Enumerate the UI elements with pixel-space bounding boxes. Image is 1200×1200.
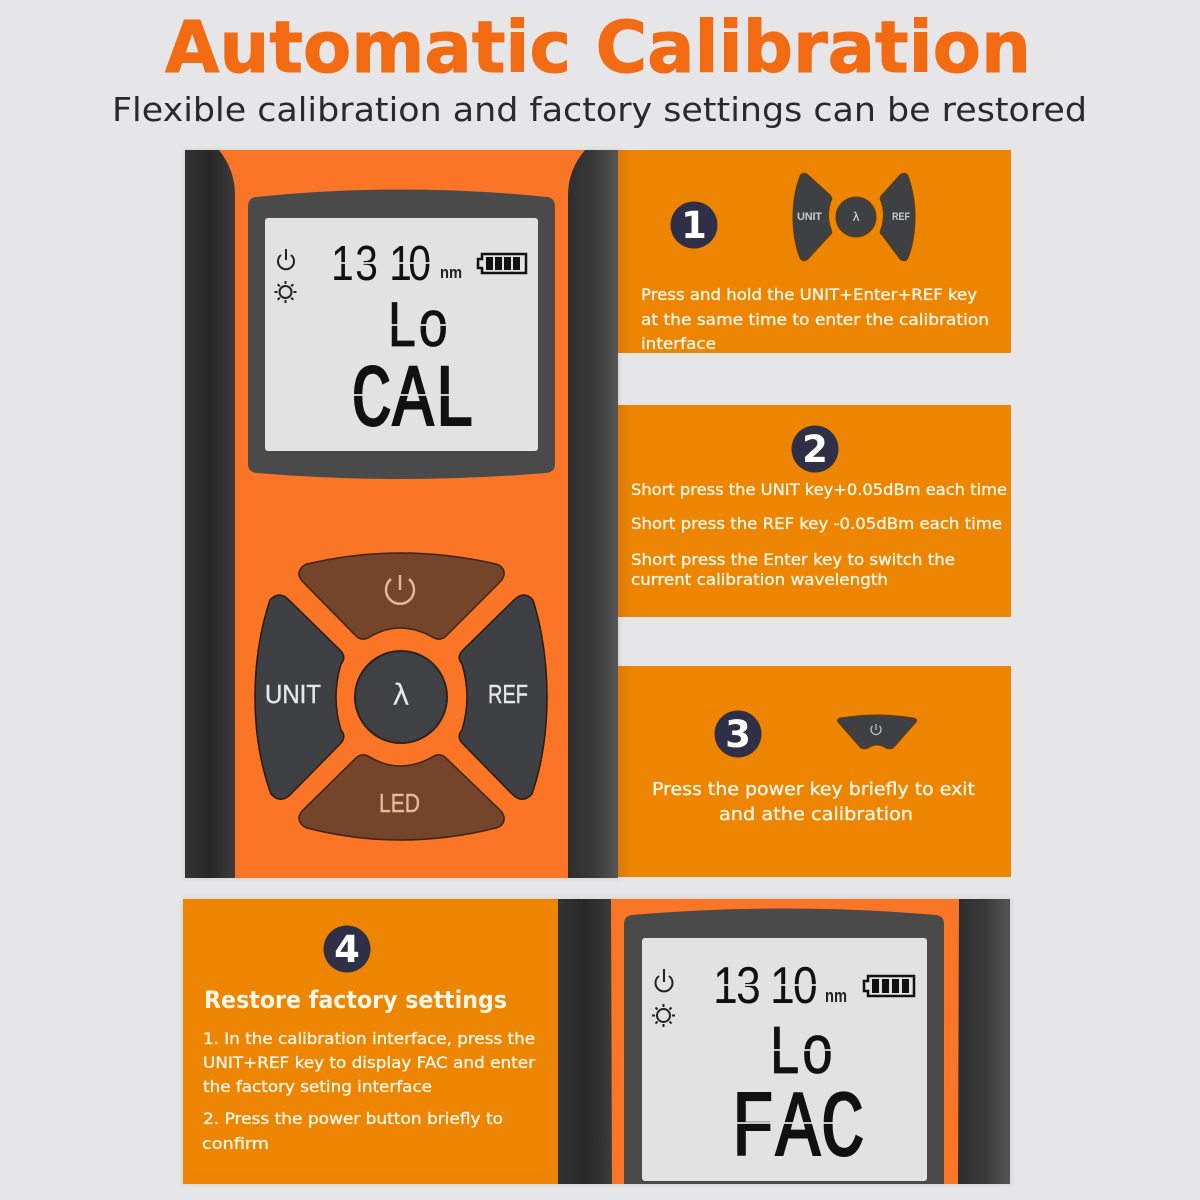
- step badge 4: 4: [334, 928, 360, 971]
- icon: UNIT, enter and REF keys: [793, 173, 915, 261]
- instruction text 1: [641, 285, 989, 353]
- button: REF: [459, 595, 547, 799]
- icon: power key: [837, 715, 917, 749]
- status CAL: CAL: [351, 353, 475, 452]
- mode Lo: Lo: [386, 291, 449, 366]
- status FAC: FAC: [731, 1078, 865, 1184]
- icon: UNIT, enter and REF keys: REF: [892, 211, 910, 223]
- title: Automatic Calibration: [165, 6, 1031, 89]
- instruction text 4: UNIT+REF key to display FAC and enter: [203, 1053, 535, 1072]
- instruction text 1: interface: [641, 334, 716, 353]
- panel 2: [618, 405, 1011, 617]
- left grip: [558, 899, 612, 1184]
- LCD screen: [265, 218, 538, 452]
- unit nm: nm: [440, 263, 462, 282]
- step badge 3: [714, 710, 762, 758]
- device: main tester: [185, 150, 618, 878]
- step badge 4: [324, 926, 370, 972]
- subtitle: Flexible calibration and factory settings can be restored: [112, 90, 1087, 129]
- wavelength reading: 1310: [331, 235, 431, 291]
- wavelength reading: 1310: [713, 957, 818, 1015]
- LCD screen: [642, 938, 927, 1184]
- instruction text 2: [631, 480, 1007, 589]
- right grip: [568, 150, 618, 878]
- instruction text 4: 2. Press the power button briefly to: [203, 1109, 503, 1128]
- instruction text 4: 1. In the calibration interface, press the: [203, 1029, 535, 1048]
- step badge 2: [792, 426, 838, 472]
- button: REF: REF: [488, 679, 528, 709]
- button: UNIT: [255, 595, 344, 799]
- device: factory screen close-up: [558, 899, 1010, 1184]
- instruction text 2: current calibration wavelength: [631, 570, 888, 589]
- unit nm: nm: [825, 986, 847, 1006]
- icon: UNIT, enter and REF keys: λ: [852, 210, 860, 224]
- instruction text 3: [652, 779, 975, 825]
- step badge 2: 2: [802, 428, 828, 471]
- screen bezel: [248, 190, 555, 479]
- step badge 3: 3: [725, 713, 751, 756]
- button: enter lambda: λ: [392, 678, 410, 712]
- panel heading: Restore factory settings: [204, 986, 507, 1014]
- left grip: [185, 150, 235, 878]
- icon: brightness sun: [652, 1004, 675, 1027]
- instruction text 4: the factory seting interface: [203, 1077, 432, 1096]
- instruction text 3: Press the power key briefly to exit: [652, 779, 975, 800]
- right grip: [958, 899, 1010, 1184]
- panel 4: restore factory settings: [183, 899, 558, 1184]
- button: LED: LED: [379, 788, 420, 818]
- icon: power: [278, 249, 294, 269]
- instruction text 1: at the same time to enter the calibration: [641, 310, 989, 329]
- instruction text 4: [202, 1029, 535, 1153]
- instruction text 2: Short press the UNIT key+0.05dBm each time: [631, 480, 1007, 499]
- instruction text 2: Short press the REF key -0.05dBm each time: [631, 514, 1002, 533]
- icon: brightness sun: [274, 281, 296, 303]
- step badge 1: [670, 202, 718, 248]
- instruction text 2: Short press the Enter key to switch the: [631, 550, 955, 569]
- step badge 1: 1: [681, 204, 707, 247]
- instruction text 1: Press and hold the UNIT+Enter+REF key: [641, 285, 977, 304]
- icon: UNIT, enter and REF keys: UNIT: [797, 211, 822, 223]
- instruction text 4: confirm: [202, 1134, 269, 1153]
- instruction text 3: and athe calibration: [719, 804, 913, 825]
- mode Lo: Lo: [768, 1016, 834, 1095]
- button: enter lambda: [355, 651, 447, 743]
- icon: battery: [864, 976, 914, 996]
- button: UNIT: UNIT: [265, 679, 321, 709]
- button: LED: [299, 755, 504, 840]
- icon: power: [655, 969, 672, 991]
- icon: battery: [478, 254, 526, 273]
- panel 1: [618, 150, 1011, 353]
- panel 3: [618, 666, 1011, 877]
- button: power: [299, 553, 504, 639]
- screen bezel: [624, 908, 944, 1184]
